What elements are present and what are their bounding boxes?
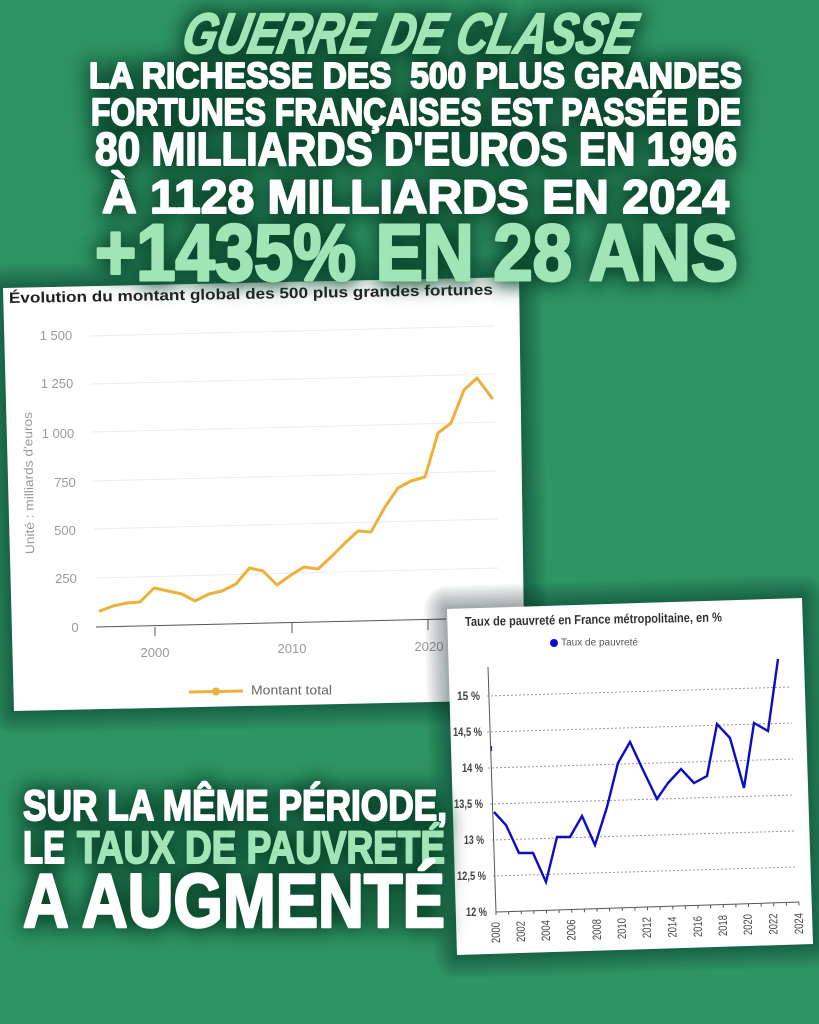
statement line 2: LE — [23, 822, 65, 873]
x axis labels: 2002 — [514, 921, 528, 942]
x axis labels: 2016 — [691, 916, 705, 937]
y axis labels: 14,5 % — [453, 727, 482, 739]
y axis labels: 15 % — [457, 691, 480, 703]
y axis labels: 13,5 % — [454, 799, 483, 811]
x axis labels: 2006 — [564, 919, 578, 941]
gridlines — [90, 326, 499, 578]
x axis labels: 2012 — [640, 917, 654, 938]
panel: poverty line chart — [447, 598, 813, 955]
title: guerre de classe: GUERRE DE CLASSE — [177, 3, 644, 66]
statement line 2: TAUX DE PAUVRETÉ — [77, 822, 445, 873]
key figure: +1435% EN 28 ANS — [95, 208, 738, 297]
legend: Montant total — [251, 682, 332, 698]
statement line 1: SUR LA MÊME PÉRIODE, — [23, 781, 447, 830]
x axis labels: 2000 — [489, 922, 503, 943]
statement line 3: A AUGMENTÉ — [23, 859, 445, 944]
dotted gridlines — [487, 687, 795, 876]
legend: Taux de pauvreté — [561, 636, 638, 648]
heading block — [89, 3, 742, 297]
x axis — [96, 619, 446, 636]
stray axis mark — [490, 746, 492, 751]
x axis labels — [489, 913, 806, 943]
x axis labels: 2010 — [278, 641, 306, 656]
x axis labels: 2022 — [766, 913, 780, 935]
headline line 3: 80 MILLIARDS D'EUROS EN 1996 — [95, 123, 737, 175]
y axis labels — [453, 691, 487, 919]
x axis labels: 2004 — [539, 920, 553, 941]
y axis labels: 250 — [55, 571, 77, 586]
x axis labels: 2018 — [716, 915, 730, 936]
poverty curve — [494, 659, 778, 882]
headline line 4: À 1128 MILLIARDS EN 2024 — [102, 170, 729, 223]
x axis labels: 2020 — [415, 639, 443, 654]
y axis labels: 0 — [71, 620, 79, 635]
wealth curve — [100, 378, 492, 611]
panel: wealth line chart — [3, 277, 525, 711]
x axis labels: 2008 — [590, 919, 604, 940]
axes — [488, 667, 799, 915]
x axis labels — [141, 639, 443, 660]
y axis labels: 1 000 — [42, 426, 74, 441]
y axis labels: 12 % — [466, 907, 487, 919]
y axis title: Unité : milliards d'euros — [21, 412, 37, 554]
headline line 1: LA RICHESSE DES 500 PLUS GRANDES — [89, 55, 742, 96]
y axis labels: 500 — [54, 523, 76, 538]
x axis labels: 2024 — [792, 913, 806, 934]
y axis labels — [40, 328, 79, 635]
bottom statement — [23, 781, 447, 944]
y axis labels: 1 500 — [40, 328, 72, 343]
chart title: Évolution du montant global des 500 plus grandes fortunes — [9, 282, 493, 307]
y axis labels: 12,5 % — [457, 871, 486, 883]
y axis labels: 13 % — [464, 835, 484, 847]
x axis labels: 2000 — [141, 645, 169, 660]
y axis labels: 1 250 — [41, 376, 73, 391]
x axis labels: 2014 — [665, 916, 679, 938]
x axis labels: 2020 — [741, 914, 755, 935]
y axis labels: 14 % — [462, 763, 483, 775]
x axis labels: 2010 — [615, 918, 629, 939]
chart title: Taux de pauvreté en France métropolitaine, en % — [465, 610, 722, 629]
legend — [189, 682, 332, 698]
y axis labels: 750 — [54, 475, 76, 490]
